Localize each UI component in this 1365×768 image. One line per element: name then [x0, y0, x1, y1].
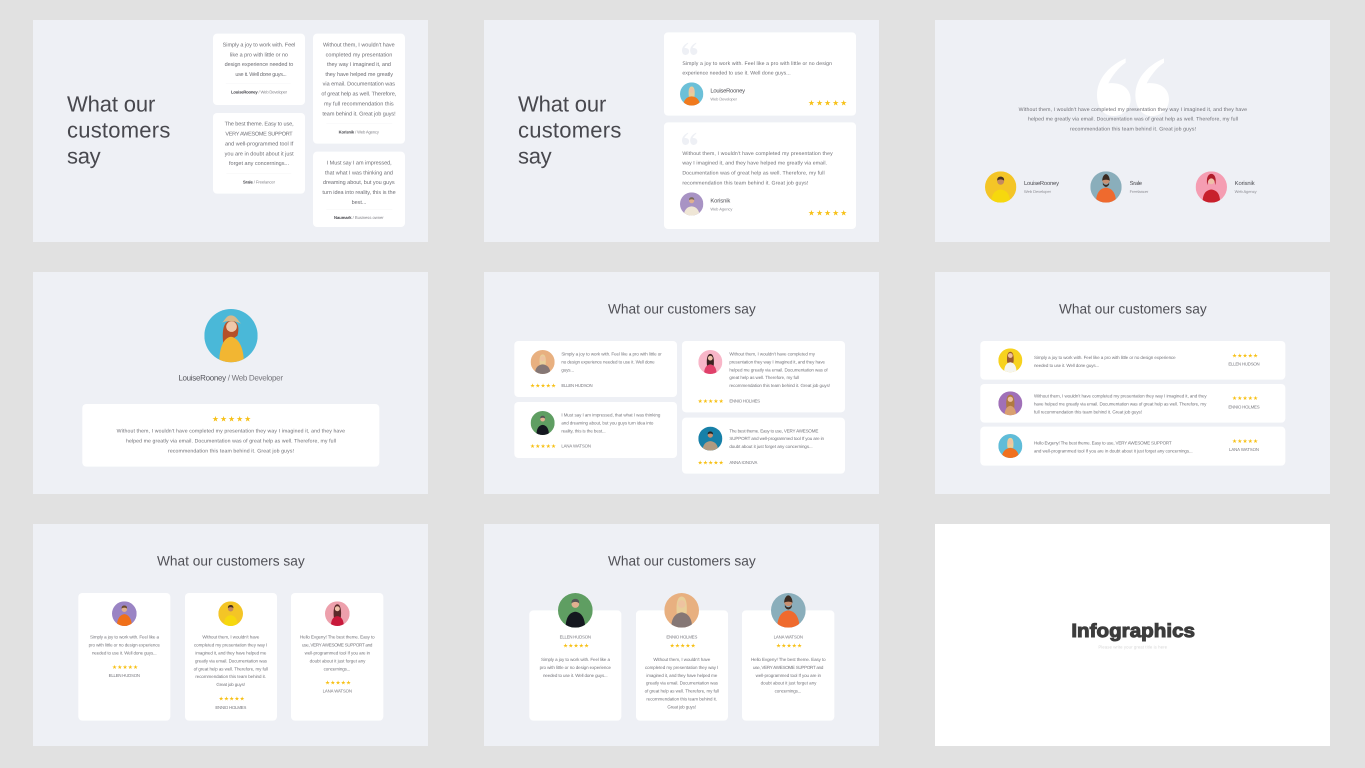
star rating: ★★★★★	[219, 696, 245, 702]
card: Ennio Holmes: Without them, I wouldn't have	[202, 635, 259, 640]
card: Ellen Hudson: guys...	[561, 367, 574, 372]
card: Srale review	[213, 113, 305, 194]
card: Lana Watson: LANA WATSON	[561, 444, 591, 449]
row: Ennio Holmes: Without them, I wouldn't have completed my presentation they way I imagined it, and they	[1034, 394, 1207, 399]
panel: slide 5, two-column review grid	[484, 272, 879, 494]
heading: What our customers say: What our	[67, 92, 155, 116]
avatar	[218, 601, 243, 626]
card: Lana Watson: and dreaming about, but you guys turn idea into	[561, 420, 653, 425]
card: Srale review: VERY AWESOME SUPPORT	[225, 131, 293, 137]
card: Lana Watson: reality, this is the best...	[561, 428, 606, 433]
row: Ennio Holmes: have helped me greatly via email. Documentation was of great help as well. Therefore, my	[1034, 402, 1206, 407]
card: Ennio Holmes: Great job guys!	[216, 682, 245, 687]
card: Ennio Holmes: presentation they way I imagined it, and they have	[729, 359, 825, 364]
panel: slide 2, cards with quote marks	[484, 20, 879, 242]
heading: What our customers say: say	[518, 144, 552, 168]
card: LouiseRooney testimonial: experience needed to use it. Well done guys...	[682, 70, 791, 76]
card: Lana Watson: LANA WATSON	[774, 635, 803, 640]
panel: slide 7, three review columns	[33, 524, 428, 746]
card: Ennio Holmes: recommendation this team behind it.	[646, 696, 717, 701]
card: Korisnik review: via email. Documentation was	[323, 81, 395, 87]
card: Ennio Holmes: greatly via email. Documentation was	[195, 658, 267, 663]
card: Ellen Hudson: needed to use it. Well done guys...	[92, 651, 157, 656]
heading: What our customers say: customers	[67, 118, 170, 142]
row: Lana Watson: LANA WATSON	[1229, 447, 1259, 452]
star rating: ★★★★★	[212, 415, 252, 423]
card: Lana Watson: Hello Evgeny! The best theme. Easy to	[751, 657, 826, 662]
card: Ellen Hudson: pro with little or no design experience	[89, 643, 160, 648]
row: Ellen Hudson: ELLEN HUDSON	[1228, 361, 1260, 366]
icon: large white quote mark	[1097, 58, 1169, 116]
quote text	[1019, 107, 1247, 132]
card: Ellen Hudson	[514, 341, 677, 397]
quote text: helped me greatly via email. Documentation was of great help as well. Therefore, my full	[1028, 116, 1238, 122]
card: Korisnik review: Korisnik / Web Agency	[339, 130, 379, 134]
card: Anna Ionova	[682, 418, 845, 474]
avatar: LouiseRooney large	[204, 309, 258, 362]
card: Korisnik testimonial: Web Agency	[710, 207, 732, 211]
card: LouiseRooney review: design experience needed to	[225, 61, 293, 67]
card: Srale review: forget any concernings...	[229, 160, 289, 166]
card: testimonial	[82, 404, 379, 467]
name and role: LouiseRooney / Web Developer	[178, 374, 283, 383]
card: Lana Watson: well-programmed tool If you are in	[755, 673, 821, 678]
card: Korisnik review: team behind it. Great job guys!	[322, 111, 396, 117]
card: Srale review: Srale / Freelancer	[243, 180, 275, 185]
card: LouiseRooney review: Simply a joy to work with. Feel	[223, 42, 295, 48]
card: testimonial: Without them, I wouldn't have completed my presentation they way I imagined it, and they have	[117, 428, 345, 434]
row: Lana Watson	[980, 427, 1285, 466]
card: Korisnik testimonial: Korisnik	[710, 197, 730, 204]
row: Ennio Holmes: full recommendation this team behind it. Great job guys!	[1034, 410, 1142, 415]
heading: What our customers say	[518, 92, 621, 168]
card: Lana Watson: doubt about it just forget any	[310, 658, 365, 663]
card: LouiseRooney review	[213, 34, 305, 105]
card: Naumark review: turn idea into reality, this is the	[322, 189, 396, 195]
avatar	[531, 350, 555, 374]
card: Ennio Holmes: Without them, I wouldn't have completed my	[729, 351, 815, 356]
card: Korisnik review: Without them, I wouldn't have	[323, 42, 395, 48]
panel: slide 9, Infographics closing slide	[935, 524, 1330, 746]
avatar	[998, 348, 1022, 372]
card: Korisnik testimonial: way I imagined it, and they have helped me greatly via email.	[682, 160, 827, 166]
row: Ellen Hudson: needed to use it. Well done guys...	[1034, 363, 1099, 368]
card: Lana Watson: I Must say I am impressed, that what I was thinking	[561, 412, 660, 417]
star rating: ★★★★★	[808, 99, 848, 107]
person: Srale: Freelancer	[1130, 189, 1148, 194]
card: Ennio Holmes: imagined it, and they have helped me	[646, 673, 717, 678]
star rating: ★★★★★	[776, 643, 802, 649]
card: Ennio Holmes	[185, 593, 277, 721]
star rating: ★★★★★	[112, 664, 138, 671]
card: Korisnik testimonial	[664, 122, 856, 229]
star rating: ★★★★★	[530, 443, 556, 450]
heading: What our customers say: What our	[518, 92, 606, 116]
star rating: ★★★★★	[698, 459, 724, 466]
card: Korisnik review	[313, 34, 405, 144]
card: Anna Ionova: doubt about it just forget any concernings...	[729, 444, 813, 449]
row: Lana Watson: Hello Evgeny! The best theme. Easy to use, VERY AWESOME SUPPORT	[1034, 441, 1172, 446]
card: Ellen Hudson: Simply a joy to work with. Feel like a	[541, 657, 610, 662]
quote text: Without them, I wouldn't have completed my presentation they way I imagined it, and they have	[1019, 107, 1247, 112]
avatar	[558, 593, 593, 628]
card: Ennio Holmes: completed my presentation they way I	[645, 665, 718, 670]
card: LouiseRooney review: use it. Well done guys...	[235, 71, 287, 77]
avatar	[325, 601, 350, 626]
card: Ennio Holmes: helped me greatly via email. Documentation was of	[729, 367, 828, 372]
person: Srale: Srale	[1130, 180, 1142, 186]
person: LouiseRooney	[985, 171, 1059, 203]
card: Korisnik review: they way I imagined it, and	[327, 61, 391, 67]
star rating: ★★★★★	[1232, 352, 1258, 359]
card: Lana Watson: concernings...	[324, 666, 350, 671]
person: Korisnik	[1196, 171, 1257, 203]
avatar	[698, 350, 722, 374]
star rating: ★★★★★	[808, 209, 848, 217]
card: Lana Watson: use, VERY AWESOME SUPPORT and	[302, 643, 372, 648]
panel: slide 6, review rows	[935, 272, 1330, 494]
card: Ennio Holmes: completed my presentation they way I	[194, 643, 267, 648]
card: LouiseRooney review: like a pro with little or no	[230, 52, 288, 58]
card: Lana Watson	[742, 593, 834, 721]
card: Ennio Holmes: imagined it, and they have helped me	[195, 651, 266, 656]
row: Lana Watson: and well-programmed tool If you are in doubt about it just forget any concernings...	[1034, 449, 1193, 454]
heading: What our customers say	[67, 92, 170, 168]
card: Srale review: and well-programmed tool If	[225, 141, 293, 147]
star rating: ★★★★★	[325, 680, 351, 686]
star rating: ★★★★★	[670, 643, 696, 649]
star rating: ★★★★★	[698, 398, 724, 405]
avatar: Korisnik	[680, 192, 703, 216]
card: Naumark review: I Must say I am impressed,	[327, 160, 392, 166]
avatar	[531, 411, 555, 435]
card: Ellen Hudson: needed to use it. Well done guys...	[543, 673, 608, 678]
row: Ennio Holmes: ENNIO HOLMES	[1228, 404, 1260, 409]
avatar	[698, 427, 722, 451]
heading: What our customers say	[608, 553, 756, 568]
person: Srale	[1090, 171, 1148, 203]
quote text: recommendation this team behind it. Great job guys!	[1070, 126, 1196, 132]
card: LouiseRooney testimonial	[664, 32, 856, 116]
card: LouiseRooney testimonial: Web Developer	[710, 97, 737, 101]
panel: slide 4, single testimonial	[33, 272, 428, 494]
card: Korisnik review: my full recommendation this	[324, 101, 394, 107]
card: LouiseRooney testimonial: Simply a joy to work with. Feel like a pro with little or no design	[682, 61, 832, 66]
card: Srale review: you are in doubt about it just	[225, 151, 294, 157]
avatar	[771, 593, 806, 628]
avatar	[998, 434, 1022, 458]
card: Ennio Holmes: Great job guys!	[667, 704, 696, 709]
card: Korisnik testimonial: Documentation was of great help as well. Therefore, my full	[682, 170, 825, 176]
heading: What our customers say: say	[67, 144, 101, 168]
card: Ennio Holmes: of great help as well. Therefore, my full	[194, 666, 268, 671]
star rating: ★★★★★	[1232, 438, 1258, 445]
card: Ennio Holmes: Without them, I wouldn't have	[653, 657, 710, 662]
card: Korisnik testimonial: Without them, I wouldn't have completed my presentation they	[682, 151, 833, 156]
card: Naumark review: that what I was thinking and	[325, 170, 393, 176]
card: Ennio Holmes	[682, 341, 845, 412]
card: Ennio Holmes: ENNIO HOLMES	[215, 705, 246, 710]
card: Lana Watson: concernings...	[775, 689, 801, 694]
heading: What our customers say	[1059, 301, 1207, 316]
icon: quote mark	[682, 43, 697, 55]
heading: What our customers say: customers	[518, 118, 621, 142]
icon: quote mark	[682, 133, 697, 145]
star rating: ★★★★★	[530, 382, 556, 389]
panel: slide 1, text cards	[33, 20, 428, 242]
card: Naumark review: best...	[352, 199, 366, 205]
card: Lana Watson	[514, 402, 677, 458]
subtitle: Please write your great title is here	[1098, 644, 1167, 649]
heading: What our customers say	[157, 553, 305, 568]
card: LouiseRooney testimonial: LouiseRooney	[710, 87, 745, 94]
card: Korisnik testimonial: recommendation this team behind it. Great job guys!	[682, 180, 808, 186]
person: Korisnik: Web Agency	[1235, 189, 1257, 194]
avatar	[998, 391, 1022, 415]
avatar	[664, 593, 699, 628]
avatar: LouiseRooney	[680, 82, 703, 106]
card: Ellen Hudson: ELLEN HUDSON	[109, 673, 140, 678]
card: Anna Ionova: The best theme. Easy to use, VERY AWESOME	[729, 428, 818, 433]
card: Lana Watson: use, VERY AWESOME SUPPORT and	[753, 665, 823, 670]
card: Anna Ionova: SUPPORT and well-programmed tool If you are in	[729, 436, 824, 441]
card: Ennio Holmes: greatly via email. Documentation was	[646, 681, 718, 686]
card: Ellen Hudson: no design experience needed to use it. Well done	[561, 359, 655, 364]
card: LouiseRooney review: LouiseRooney / Web Developer	[231, 90, 287, 95]
card: Ennio Holmes: recommendation this team behind it.	[195, 674, 266, 679]
star rating: ★★★★★	[1232, 395, 1258, 402]
card: testimonial: recommendation this team behind it. Great job guys!	[168, 448, 294, 454]
title: Infographics: Infographics	[1071, 620, 1195, 641]
card: Lana Watson	[291, 593, 383, 721]
person: LouiseRooney: LouiseRooney	[1024, 180, 1059, 186]
person: Korisnik: Korisnik	[1235, 180, 1255, 186]
card: Korisnik review: they have helped me greatly	[325, 71, 393, 77]
card: Anna Ionova: ANNA IONOVA	[729, 460, 757, 465]
card: Srale review: The best theme. Easy to use,	[225, 121, 294, 127]
card: Ellen Hudson	[529, 593, 621, 721]
card: Lana Watson: Hello Evgeny! The best theme. Easy to	[300, 635, 375, 640]
card: Ellen Hudson: pro with little or no design experience	[540, 665, 611, 670]
card: Lana Watson: LANA WATSON	[323, 689, 352, 694]
card: Naumark review: dreaming about, but you guys	[323, 179, 395, 185]
card: Korisnik review: of great help as well. Therefore,	[321, 91, 396, 97]
card: Ennio Holmes: great help as well. Therefore, my full	[729, 375, 799, 380]
card: Ellen Hudson: ELLEN HUDSON	[560, 635, 591, 640]
card: Ellen Hudson: Simply a joy to work with. Feel like a	[90, 635, 159, 640]
row: Ellen Hudson: Simply a joy to work with. Feel like a pro with little or no design experience	[1034, 355, 1176, 360]
card: Ellen Hudson: ELLEN HUDSON	[561, 383, 593, 388]
card: Naumark review: Naumark / Business owner	[334, 215, 384, 220]
card: Lana Watson: doubt about it just forget any	[761, 681, 816, 686]
person: LouiseRooney: Web Developer	[1024, 189, 1051, 194]
card: Ennio Holmes	[636, 593, 728, 721]
panel: slide 3, big quote with three people	[935, 20, 1330, 242]
heading: What our customers say	[608, 301, 756, 316]
card: Ennio Holmes: of great help as well. Therefore, my full	[645, 689, 719, 694]
star rating: ★★★★★	[563, 643, 589, 649]
card: Korisnik review: completed my presentation	[326, 52, 392, 58]
card: Ennio Holmes: ENNIO HOLMES	[729, 399, 760, 404]
card: Ellen Hudson: Simply a joy to work with. Feel like a pro with little or	[561, 351, 662, 356]
panel: slide 8, three cards with overlapping avatars	[484, 524, 879, 746]
avatar	[112, 601, 137, 626]
card: Ennio Holmes: recommendation this team behind it. Great job guys!	[729, 383, 830, 388]
row: Ennio Holmes	[980, 384, 1285, 423]
card: Ennio Holmes: ENNIO HOLMES	[666, 635, 697, 640]
card: Lana Watson: well-programmed tool If you are in	[304, 651, 370, 656]
card: Naumark review	[313, 152, 405, 227]
row: Ellen Hudson	[980, 341, 1285, 380]
card: testimonial: helped me greatly via email. Documentation was of great help as well. Therefore, my full	[126, 438, 336, 444]
card: Ellen Hudson	[78, 593, 170, 721]
